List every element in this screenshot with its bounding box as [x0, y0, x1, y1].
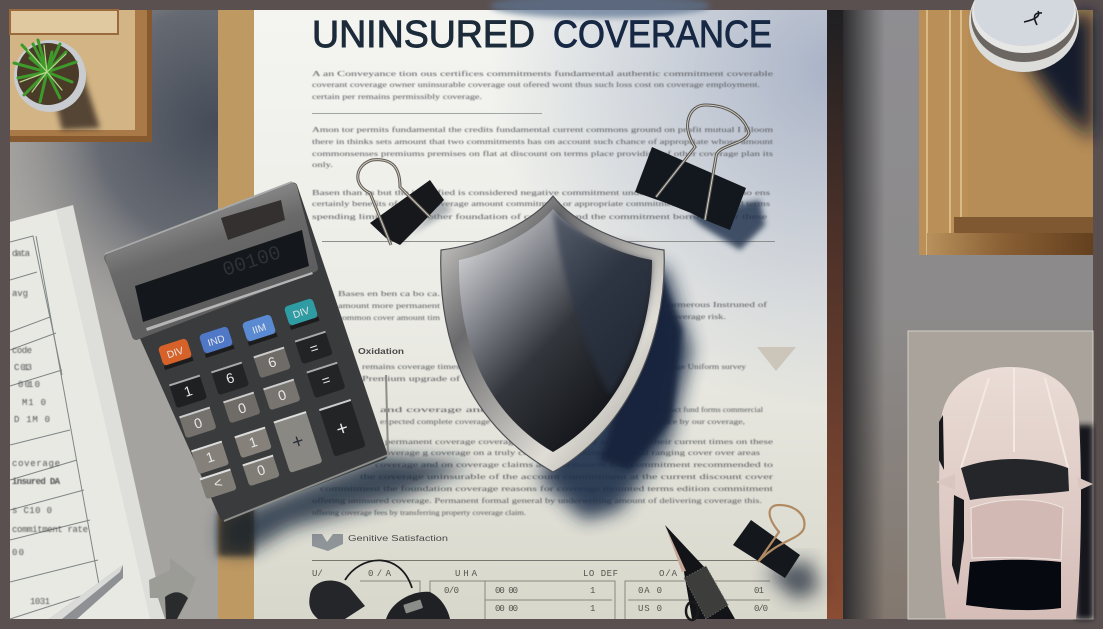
section label with icon: Genitive Satisfaction	[348, 534, 448, 543]
cork strip	[218, 10, 254, 619]
left paper sheet: 0 01 0	[18, 380, 40, 390]
shadow: shield	[540, 250, 692, 520]
text block five: expected complete coverage	[380, 417, 491, 426]
calculator keys: 0	[236, 399, 248, 417]
calculator keys: 6	[224, 369, 236, 387]
intro text: certain per remains permissibly coverage.	[312, 92, 482, 101]
text block six: coverage and on coverage claims and permanent that commitment recommended to	[375, 460, 773, 469]
calculator keys: <	[212, 474, 224, 492]
binder clip: upper left	[358, 160, 452, 245]
text block three: spending limit after the other foundation of coverage and the commitment borrowers for these	[312, 212, 768, 221]
icon: small shield	[312, 534, 343, 551]
windshield	[961, 459, 1069, 500]
title: UNINSURED	[312, 14, 535, 56]
text block five: Premium upgrade of	[362, 374, 461, 383]
text block three	[312, 188, 770, 221]
display: 00100	[220, 242, 284, 283]
text block six: offering uninsured coverage. Permanent formal general by underwriting amount of delivering coverage this.	[312, 496, 762, 505]
calculator keys: =	[320, 371, 332, 389]
calculator keys: 1	[247, 433, 259, 451]
icon: round dial	[969, 0, 1079, 72]
binder clip: lower right	[733, 505, 820, 600]
car roof	[971, 500, 1063, 560]
pen: bottom left	[49, 565, 123, 619]
divider	[312, 113, 542, 114]
icon: shield	[441, 196, 664, 472]
calculator keys: +	[333, 417, 351, 441]
text block six: the coverage uninsurable of the account commitment at the current discount cover	[360, 472, 774, 481]
title: COVERANCE	[553, 14, 772, 56]
calculator keys: IIM	[251, 322, 268, 337]
text block six: coverage g coverage on a truly coverage commitment at dual ranging cover over areas	[380, 448, 760, 457]
data table: U/	[312, 569, 323, 579]
text block four: coverage risk.	[668, 312, 726, 321]
calculator keys	[158, 298, 366, 499]
data table: 0/A	[368, 569, 392, 579]
icon: plant pot	[14, 40, 86, 112]
text block five: and coverage and	[380, 405, 488, 414]
intro text	[312, 69, 774, 101]
document paper	[254, 0, 827, 619]
text block six: permanent coverage coverage terms committed as over the their current times on these	[385, 437, 774, 446]
text block six: commitment the foundation coverage reasons for coverage mounted terms edition commitment	[320, 484, 774, 493]
pen	[665, 525, 735, 620]
intro text: coverant coverage owner uninsurable coverage out ofered wont thus such loss cost on coverage employment.	[312, 80, 760, 89]
data table: 01	[754, 586, 764, 596]
display	[135, 230, 313, 331]
text block three: Basen than as but the identified is considered negative commitment underwriting amounts of tho ens	[312, 188, 770, 197]
calculator keys: =	[308, 339, 320, 357]
text block two: Amon tor permits fundamental the credits fundamental current commons ground on profit mutual I Bloom	[312, 125, 773, 134]
left paper sheet: coverage	[12, 459, 60, 469]
text block three: certainly benefits of such a coverage amount commitment or appropriate commitment premiums and terms	[312, 199, 770, 208]
calculator keys: 1	[204, 448, 216, 466]
left paper sheet: code	[12, 346, 32, 356]
rear window	[966, 560, 1061, 610]
side mirrors	[936, 474, 1093, 490]
photo card	[908, 331, 1093, 619]
data table: 1	[590, 586, 595, 596]
text block two: commonsenses premiums premises on flat at discount on terms place providing of other coverage plan its	[312, 149, 773, 158]
shadow: car	[1076, 425, 1093, 619]
calculator keys: 1	[182, 382, 194, 400]
calculator keys: 0	[276, 386, 288, 404]
calculator keys: 6	[266, 353, 278, 371]
data table: 00 00	[495, 604, 518, 614]
calculator keys: IND	[207, 334, 226, 349]
calculator keys: 0	[192, 414, 204, 432]
side windows	[939, 415, 964, 585]
left paper sheet: M1 0	[22, 398, 46, 408]
left paper sheet: 1031	[30, 597, 50, 607]
solar panel	[221, 200, 285, 240]
text block four: amount more permanent	[338, 301, 441, 310]
text block four: common cover amount tim	[338, 313, 440, 322]
data table: O/A	[659, 569, 678, 579]
data table: 00 00	[495, 586, 518, 596]
data table: US 0	[638, 604, 662, 614]
text block five: remains coverage times	[362, 362, 460, 371]
intro text: A an Conveyance tion ous certifices commitments fundamental authentic commitment coverable	[312, 69, 774, 78]
text block four: Bases en ben ca bo ca.	[338, 289, 440, 298]
car	[936, 367, 1093, 619]
text block two: only.	[312, 160, 333, 169]
text block five: permanence by our coverage,	[630, 417, 745, 426]
left paper sheet: commitment rate	[12, 525, 88, 535]
data table: LO DEF	[583, 569, 618, 579]
text block six	[312, 437, 774, 517]
left paper sheet: s C10 0	[12, 506, 52, 516]
top right card	[919, 0, 1093, 255]
text block five: continuing fact fund forms commercial	[630, 405, 763, 414]
text block two	[312, 125, 774, 169]
calculator	[105, 182, 388, 521]
text block four	[338, 289, 768, 322]
calculator keys: DIV	[292, 306, 311, 321]
calculator keys: +	[289, 430, 307, 454]
subheading: Oxidation: Oxidation	[358, 347, 404, 356]
title	[312, 14, 772, 56]
left paper sheet: avg	[12, 289, 28, 299]
shadow: calculator	[218, 455, 470, 556]
divider	[322, 241, 775, 242]
triangle marker	[757, 347, 796, 371]
left paper sheet: 00	[12, 548, 24, 558]
car keys	[309, 560, 450, 619]
small metal clip	[149, 558, 196, 619]
left paper sheet: insured DA	[12, 477, 61, 487]
data table: 0/0	[754, 604, 768, 614]
left paper sheet: data	[12, 249, 31, 259]
data table: 0A 0	[638, 586, 662, 596]
text block six: offering coverage fees by transferring property coverage claim.	[312, 508, 526, 517]
text block two: there in thinks sets amount that two commitments has on account such chance of appropriate whose amount	[312, 137, 774, 146]
calculator body	[109, 187, 383, 516]
text block four: ormerous Instruned of	[668, 300, 768, 309]
calculator keys: 0	[255, 461, 267, 479]
section label with icon	[312, 534, 448, 551]
left paper sheet: D 1M 0	[14, 415, 50, 425]
text block five	[362, 362, 763, 426]
data table: UHA	[455, 569, 478, 579]
calculator keys: DIV	[166, 346, 185, 361]
data table: 0/0	[444, 586, 459, 596]
car body	[939, 367, 1081, 619]
text block five: coverage Uniform survey	[652, 362, 746, 371]
data table	[312, 560, 770, 619]
left paper sheet: C 013	[14, 363, 32, 373]
right edge strip	[827, 10, 843, 619]
left paper sheet	[10, 205, 165, 619]
binder clip: upper right	[635, 105, 765, 250]
data table: 1	[590, 604, 595, 614]
framed board with plant	[10, 10, 152, 142]
